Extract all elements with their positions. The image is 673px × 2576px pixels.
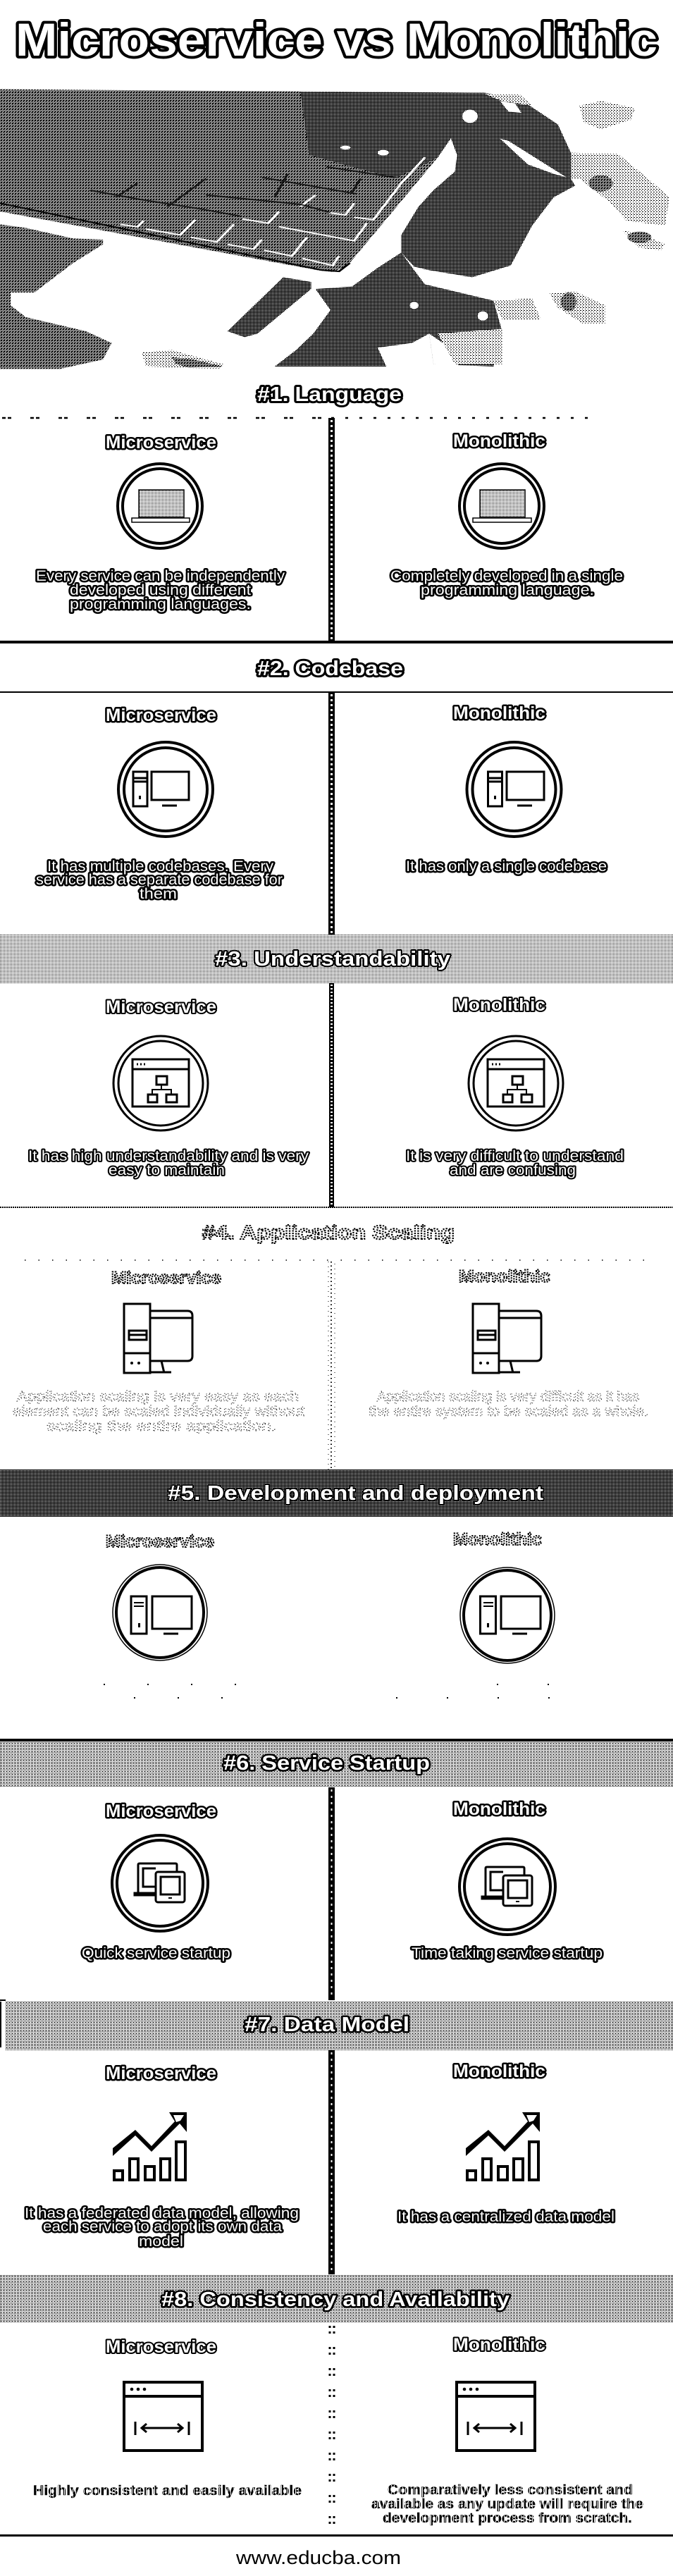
icon: desktop computer xyxy=(118,742,213,837)
panel: codebase monolithic xyxy=(406,703,607,875)
band: development and deployment xyxy=(0,1469,673,1517)
description: element can be scaled individually without xyxy=(13,1404,304,1419)
panel: data model monolithic xyxy=(397,2062,615,2225)
section 6: service startup xyxy=(0,1742,673,2000)
column heading: Microservice xyxy=(106,997,216,1017)
description xyxy=(13,1389,304,1434)
description: It has a centralized data model xyxy=(397,2209,615,2225)
column heading: Monolithic xyxy=(453,1530,542,1549)
description: It has high understandability and is very xyxy=(28,1148,309,1164)
icon: desktop tower and monitor xyxy=(473,1304,541,1373)
icon: desktop computer xyxy=(460,1567,555,1663)
heading: data model: #7. Data Model xyxy=(245,2014,409,2036)
description: each service to adopt its own data xyxy=(43,2219,282,2235)
heading: development and deployment: #5. Development and deployment xyxy=(168,1482,543,1505)
description xyxy=(371,2483,643,2526)
description xyxy=(25,2205,299,2250)
panel: development microservice xyxy=(104,1532,247,1698)
column heading: Monolithic xyxy=(459,1267,550,1286)
title: Microservice vs Monolithic xyxy=(16,13,657,66)
section 8: consistency and availability xyxy=(0,2274,673,2537)
description: available as any update will require the xyxy=(371,2497,643,2512)
heading: understandability: #3. Understandability xyxy=(215,948,450,970)
icon: growth chart xyxy=(466,2112,540,2180)
faded description dots xyxy=(104,1684,247,1698)
panel: language monolithic xyxy=(390,431,623,598)
panel: service startup monolithic xyxy=(412,1799,603,1961)
heading: language: #1. Language xyxy=(257,383,402,406)
icon: desktop tower and monitor xyxy=(124,1304,192,1373)
column heading: Monolithic xyxy=(453,2062,545,2081)
column heading: Monolithic xyxy=(453,1799,545,1819)
column heading: Monolithic xyxy=(453,2335,545,2355)
band: consistency and availability xyxy=(0,2274,673,2323)
panel: development monolithic xyxy=(396,1530,599,1698)
photo: laptop keyboard and mouse xyxy=(0,90,669,369)
column heading: Microservice xyxy=(106,433,216,452)
icon: laptop and tablet xyxy=(112,1835,208,1931)
description: Every service can be independently xyxy=(36,568,285,584)
description: Quick service startup xyxy=(82,1945,230,1961)
column heading: Microservice xyxy=(106,1532,214,1551)
description: It has multiple codebases. Every xyxy=(47,858,274,875)
description xyxy=(369,1389,648,1419)
panel: application scaling microservice xyxy=(13,1269,304,1434)
icon: laptop and tablet xyxy=(459,1839,555,1935)
heading: consistency and availability: #8. Consistency and Availability xyxy=(161,2288,510,2311)
heading: service startup: #6. Service Startup xyxy=(223,1752,430,1775)
band: data model xyxy=(6,2002,673,2050)
description xyxy=(36,568,285,612)
icon: site hierarchy window xyxy=(113,1036,208,1130)
heading: codebase: #2. Codebase xyxy=(257,658,403,680)
section 3: understandability xyxy=(0,935,673,1207)
description: them xyxy=(140,886,177,902)
band: understandability xyxy=(0,935,673,983)
band: service startup xyxy=(0,1742,673,1787)
column heading: Monolithic xyxy=(453,703,545,723)
panel: consistency monolithic xyxy=(371,2335,643,2526)
panel: data model microservice xyxy=(25,2064,299,2250)
description: the entire system to be scaled as a whole. xyxy=(369,1404,648,1419)
section 2: codebase xyxy=(0,658,673,935)
description: It is very difficult to understand xyxy=(406,1148,624,1164)
faded description dots xyxy=(396,1684,599,1698)
section 4: application scaling xyxy=(13,1221,655,1469)
description: It has only a single codebase xyxy=(406,858,607,875)
icon: window with range arrow xyxy=(457,2382,535,2451)
description xyxy=(36,858,283,902)
description: programming language. xyxy=(421,582,594,598)
description xyxy=(390,568,623,598)
description: service has a separate codebase for xyxy=(36,872,283,888)
description: programming languages. xyxy=(70,596,251,612)
column heading: Microservice xyxy=(106,2337,216,2357)
description: Application scaling is very difficult as it has xyxy=(377,1389,639,1405)
icon: laptop xyxy=(459,464,544,548)
panel: application scaling monolithic xyxy=(369,1267,648,1419)
description: scaling the entire application. xyxy=(47,1419,276,1434)
description: easy to maintain xyxy=(109,1162,225,1178)
description xyxy=(28,1148,309,1178)
column heading: Microservice xyxy=(106,2064,216,2083)
section 1: language xyxy=(0,383,673,643)
panel: understandability monolithic xyxy=(406,995,624,1178)
description: Comparatively less consistent and xyxy=(388,2483,633,2498)
description: It has a federated data model, allowing xyxy=(25,2205,299,2221)
column heading: Monolithic xyxy=(453,431,545,451)
icon: laptop xyxy=(118,464,202,548)
heading: application scaling: #4. Application Scaling xyxy=(202,1221,455,1243)
panel: service startup microservice xyxy=(82,1801,230,1961)
description: Highly consistent and easily available xyxy=(33,2484,302,2498)
description: and are confusing xyxy=(450,1162,576,1178)
icon: desktop computer xyxy=(113,1565,207,1660)
column heading: Microservice xyxy=(111,1269,221,1288)
icon: window with range arrow xyxy=(124,2382,202,2451)
panel: language microservice xyxy=(36,433,285,612)
panel: understandability microservice xyxy=(28,997,309,1178)
description: Application scaling is very easy as each xyxy=(17,1389,299,1405)
description: Completely developed in a single xyxy=(390,568,623,584)
section 5: development and deployment xyxy=(0,1469,673,1742)
footer: website url: www.educba.com xyxy=(235,2547,401,2568)
description xyxy=(406,1148,624,1178)
icon: site hierarchy window xyxy=(469,1036,563,1130)
description: developed using different xyxy=(70,582,251,598)
description: development process from scratch. xyxy=(383,2511,632,2526)
panel: codebase microservice xyxy=(36,705,283,902)
icon: desktop computer xyxy=(467,742,561,837)
column heading: Monolithic xyxy=(453,995,545,1015)
panel: consistency microservice xyxy=(33,2337,302,2498)
column heading: Microservice xyxy=(106,705,216,725)
column heading: Microservice xyxy=(106,1801,216,1821)
section 7: data model xyxy=(0,1999,673,2274)
icon: growth chart xyxy=(113,2112,187,2180)
description: model xyxy=(139,2233,183,2250)
description: Time taking service startup xyxy=(412,1945,603,1961)
